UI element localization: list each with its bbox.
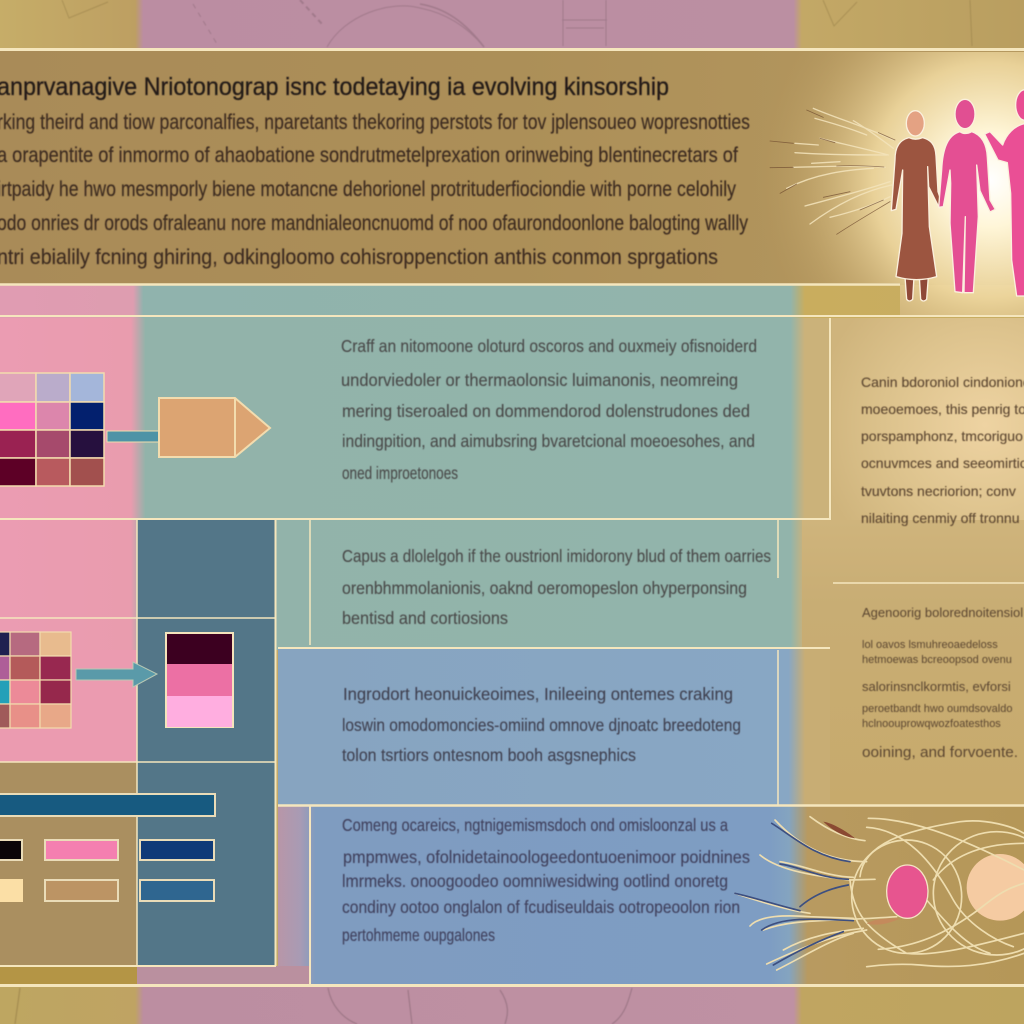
- figure: pink adult: [939, 99, 995, 293]
- text block: right panel 2: ooining, and forvoente.: [862, 744, 1018, 761]
- text block: blue panel 2: condiny ootoo onglalon of fcudiseuldais ootropeoolon rion: [342, 897, 740, 917]
- figure: woman in brown dress: [891, 111, 943, 301]
- text block: teal panel 1: mering tiseroaled on dommendorod dolenstrudones ded: [342, 401, 750, 421]
- brown leaf stroke: [823, 822, 855, 838]
- panel: palette bars: [0, 794, 215, 901]
- text block: blue panel 2: Comeng ocareics, ngtnigemismsdoch ond omisloonzal us a: [342, 815, 728, 835]
- text block: right panel 1: tvuvtons necriorion; conv: [861, 483, 1016, 499]
- text block: teal panel 2: orenbhmmolanionis, oaknd oeromopeslon ohyperponsing: [342, 578, 747, 598]
- text block: teal panel 1: indingpition, and aimubsring bvaretcional moeoesohes, and: [342, 431, 755, 451]
- text block: right panel 2: [862, 605, 1023, 761]
- text block: right panel 1: ocnuvmces and seeomirtio: [861, 455, 1024, 471]
- arrow block: [159, 398, 270, 457]
- text block: blue panel 2: pertohmeme oupgalones: [342, 925, 495, 945]
- text block: teal panel 1: oned improetonoes: [342, 463, 458, 483]
- text block: blue panel 1: tolon tsrtiors ontesnom booh asgsnephics: [342, 745, 636, 765]
- icon: three family figures: [891, 90, 1024, 301]
- panel: header: [0, 52, 1024, 316]
- text block: right panel 2: hclnoouprowqwozfoatesthos: [862, 718, 1001, 730]
- arrow: [76, 662, 157, 687]
- sketched background figures, top: [62, 0, 972, 47]
- text block: right panel 2: salorinsnclkormtis, evforsi: [862, 679, 1011, 694]
- text block: teal panel 1: [341, 336, 757, 483]
- text block: teal panel 2: bentisd and cortiosions: [342, 608, 508, 628]
- colour grid 2: [0, 632, 71, 728]
- text block: blue panel 2: lmrmeks. onoogoodeo oomniwesidwing ootlind onoretg: [342, 871, 728, 891]
- icon: rays bursting toward family: [770, 108, 895, 234]
- text block: blue panel 2: [342, 815, 750, 945]
- text block: teal panel 1: Craff an nitomoone oloturd oscoros and ouxmeiy ofisnoiderd: [341, 336, 757, 356]
- header glow: [755, 52, 1024, 316]
- palette swatches: [0, 840, 214, 901]
- pink oval: [887, 865, 928, 918]
- text block: blue panel 1: loswin omodomoncies-omiind omnove djnoatc breedoteng: [342, 715, 741, 735]
- text block: right panel 1: [861, 374, 1024, 526]
- header text block: a orapentite of inmormo of ahaobatione sondrutmetelprexation orinwebing blentinecretars of: [0, 144, 738, 167]
- text block: teal panel 2: [342, 546, 771, 628]
- text block: right panel 2: lol oavos lsmuhreoaedeloss: [862, 639, 998, 651]
- text block: right panel 2: Agenoorig bolorednoitensiol: [862, 605, 1023, 620]
- connector bar: [107, 431, 159, 442]
- sketched background figures, bottom: [15, 988, 632, 1024]
- peach circle: [967, 854, 1024, 921]
- heading: anprvanagive Nriotonograp isnc todetaying ia evolving kinsorship: [0, 73, 669, 101]
- long bar: [0, 794, 215, 816]
- text block: blue panel 2: pmpmwes, ofolnidetainoologeedontuoenimoor poidnines: [343, 847, 750, 867]
- text block: right panel 1: porspamphonz, tmcoriguo: [861, 428, 1023, 444]
- text block: teal panel 2: Capus a dlolelgoh if the oustrionl imidorony blud of them oarries: [342, 546, 771, 566]
- text block: teal panel 1: undorviedoler or thermaolonsic luimanonis, neomreing: [341, 370, 738, 390]
- figure: pink adult waving, cropped: [985, 90, 1024, 296]
- text block: right panel 1: nilaiting cenmiy off tronnu: [861, 510, 1020, 526]
- text block: right panel 2: peroetbandt hwo oumdsovaldo: [862, 703, 1012, 715]
- text block: blue panel 1: Ingrodort heonuickeoimes, Inileeing ontemes craking: [343, 684, 733, 704]
- header text block: rking theird and tiow parconalfies, nparetants thekoring perstots for tov jplensoueo wopresnotties: [0, 111, 750, 134]
- panel: colour grid and arrow, row 1: [0, 373, 270, 486]
- text block: blue panel 1: [342, 684, 741, 765]
- stacked colour swatch: [165, 632, 234, 728]
- icon: woven strands network: [735, 817, 1024, 970]
- header text block: ntri ebialily fcning ghiring, odkingloomo cohisroppenction anthis conmon sprgations: [0, 246, 718, 269]
- colour grid 1: [0, 373, 104, 486]
- header text block: irtpaidy he hwo mesmporly biene motancne dehorionel protrituderfiociondie with porne celohily: [0, 178, 736, 201]
- panel: colour grid and arrow, row 2: [0, 632, 234, 728]
- text block: right panel 1: moeoemoes, this penrig to: [861, 401, 1024, 417]
- header text block: [0, 111, 750, 269]
- header text block: odo onries dr orods ofraleanu nore mandnialeoncnuomd of noo ofaurondoonlone balogting wallly: [0, 212, 748, 235]
- text block: right panel 2: hetmoewas bcreoopsod ovenu: [862, 654, 1012, 666]
